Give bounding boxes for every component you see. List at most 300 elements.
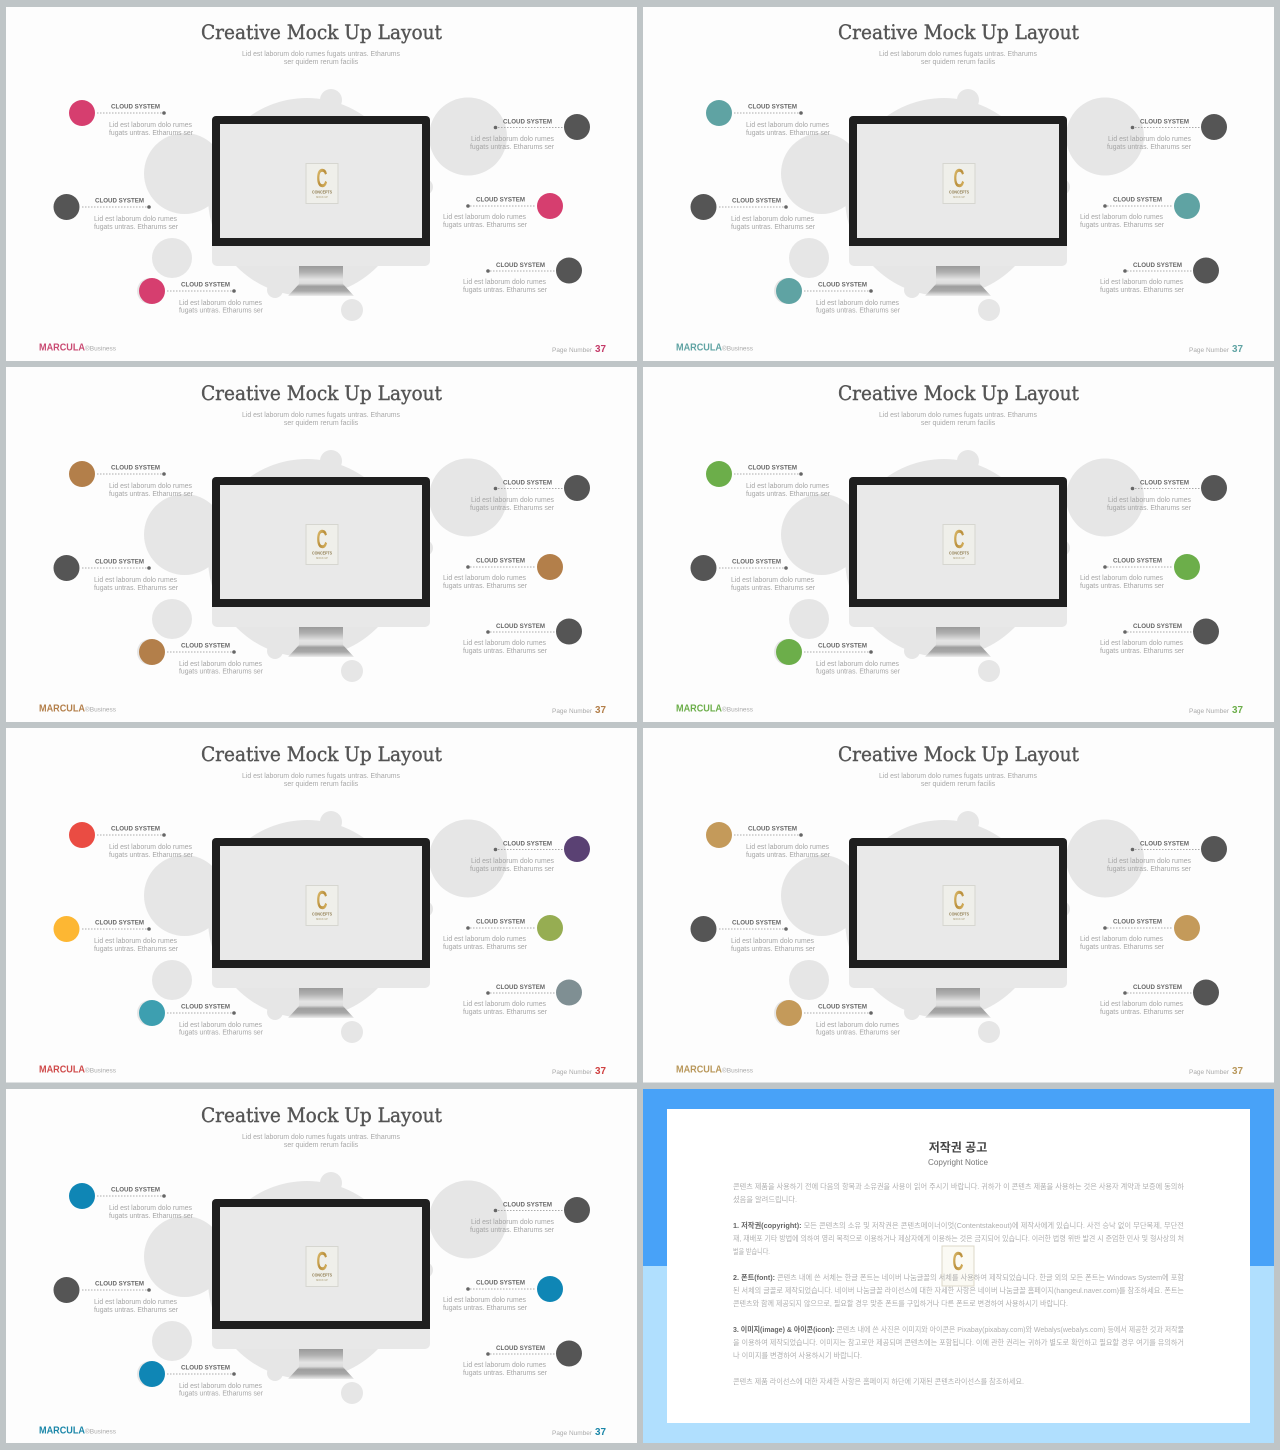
node: right 3: CLOUD SYSTEM (496, 262, 545, 269)
footer brand (676, 1064, 754, 1076)
node: right 3: Lid est laborum dolo rumes (1100, 640, 1183, 647)
slide 5: multicolour (6, 728, 637, 1082)
node: left 3: CLOUD SYSTEM (818, 1004, 867, 1010)
node: left 1: CLOUD SYSTEM (748, 464, 797, 472)
monitor: C (954, 524, 965, 554)
node: right 3 (1100, 258, 1219, 294)
node: left 1: fugats untras. Etharums ser (746, 491, 831, 498)
node: right 1 (470, 475, 590, 512)
node: left 2: CLOUD SYSTEM (95, 920, 144, 926)
node: right 1 (1107, 836, 1227, 873)
node: left 1: CLOUD SYSTEM (111, 104, 160, 110)
subtitle (242, 773, 400, 788)
node: right 1: Lid est laborum dolo rumes (471, 858, 554, 865)
page number (552, 1065, 606, 1077)
subtitle (242, 412, 400, 427)
subtitle (879, 773, 1037, 788)
watermark logo: C (952, 1246, 964, 1276)
node: right 3: Lid est laborum dolo rumes (463, 1362, 546, 1369)
page number: 37 (595, 704, 606, 716)
node: left 1: fugats untras. Etharums ser (746, 130, 831, 137)
watermark logo (942, 1246, 974, 1286)
notice title: 저작권 공고 (929, 1140, 987, 1154)
node: right 2: CLOUD SYSTEM (1113, 558, 1162, 564)
monitor (849, 116, 1067, 296)
node: right 3: CLOUD SYSTEM (1133, 984, 1182, 991)
node: right 1: fugats untras. Etharums ser (470, 1227, 555, 1234)
node: left 1: CLOUD SYSTEM (111, 826, 160, 832)
section 2 font: 된 서체의 글꼴로 제작되었습니다. 네이버 나눔글꼴 라이선스에 대한 자세한 사항은 네이버 나눔글꼴 홈페이지(hangeul.naver.com)를 참조하세요. 폰트는 (733, 1285, 1184, 1295)
footer brand: MARCULA (676, 702, 722, 714)
node: left 2: CLOUD SYSTEM (732, 920, 781, 926)
node: right 3: Lid est laborum dolo rumes (1100, 1001, 1183, 1008)
node: left 3: fugats untras. Etharums ser (816, 308, 901, 314)
node: right 3: CLOUD SYSTEM (1133, 262, 1182, 269)
subtitle: Lid est laborum dolo rumes fugats untras. Etharums (879, 773, 1037, 780)
monitor: C (316, 885, 328, 915)
monitor: MOCK UP (953, 557, 965, 560)
monitor: C (316, 1246, 328, 1276)
node: left 2: Lid est laborum dolo rumes (94, 938, 177, 945)
monitor: CONCEPTS (312, 550, 332, 556)
node: right 1: fugats untras. Etharums ser (1107, 505, 1192, 512)
subtitle (242, 51, 400, 66)
node: right 2: Lid est laborum dolo rumes (443, 214, 526, 221)
footer brand: MARCULA (39, 1064, 85, 1076)
node: left 3: CLOUD SYSTEM (818, 642, 867, 650)
section 1 copyright: 재, 재배포 기타 방법에 의하여 영리 목적으로 이용하거나 제삼자에게 이용하는 것은 금지되어 있습니다. 이러한 법령 위반 발견 시 준엄한 민사 및 형사상의 처 (733, 1233, 1184, 1243)
node: left 2 (690, 194, 816, 231)
node: left 3: Lid est laborum dolo rumes (179, 1022, 262, 1029)
section 3 image and icon: 3. 이미지(image) & 아이콘(icon): 콘텐츠 내에 쓴 사진은 이미지와 아이콘은 Pixabay(pixabay.com)와 Webalys(webalys.com) 등에서 제공한 것과 저작물 (733, 1324, 1184, 1334)
node: left 2: Lid est laborum dolo rumes (94, 216, 177, 223)
intro text: 셨음을 알려드립니다. (733, 1194, 797, 1204)
node: right 3 (1100, 618, 1219, 655)
node: right 2: Lid est laborum dolo rumes (1080, 575, 1163, 582)
node: right 2: fugats untras. Etharums ser (443, 944, 528, 951)
slide 6: tan (643, 728, 1274, 1082)
title: Creative Mock Up Layout (838, 381, 1079, 405)
footer brand: ®Business (85, 344, 117, 352)
node: left 3: fugats untras. Etharums ser (816, 1030, 901, 1036)
footer brand: MARCULA (39, 342, 85, 354)
page number: 37 (1232, 704, 1243, 716)
section 1 copyright: 1. 저작권(copyright): 모든 콘텐츠의 소유 및 저작권은 콘텐츠메이너이엇(Contentstakeout)에 제작사에게 있습니다. 사전 승낙 없이 무단복제, 무단전 (733, 1220, 1184, 1230)
node: left 1: Lid est laborum dolo rumes (109, 1205, 192, 1212)
node: left 2: Lid est laborum dolo rumes (731, 577, 814, 584)
page number (552, 343, 606, 355)
section 3 image and icon: 나 이미지를 변경하여 사용하시기 바랍니다. (733, 1350, 862, 1360)
node: left 1: fugats untras. Etharums ser (109, 130, 194, 137)
node: left 1 (69, 461, 194, 498)
subtitle: Lid est laborum dolo rumes fugats untras. Etharums (879, 51, 1037, 58)
node: left 1 (706, 100, 831, 137)
node: left 2 (54, 194, 179, 231)
footer brand (39, 702, 117, 714)
node: right 1: Lid est laborum dolo rumes (1108, 497, 1191, 504)
monitor: MOCK UP (316, 196, 328, 199)
footer brand: MARCULA (39, 1424, 85, 1436)
subtitle: ser quidem rerum facilis (921, 781, 996, 788)
monitor: CONCEPTS (312, 190, 332, 194)
monitor: C (316, 524, 328, 554)
node: right 3: fugats untras. Etharums ser (1100, 287, 1185, 294)
node: left 1 (69, 822, 194, 859)
node: left 2: CLOUD SYSTEM (95, 1280, 144, 1288)
node: right 3 (1100, 980, 1219, 1016)
node: left 3 (139, 639, 264, 676)
node: right 2 (1080, 193, 1200, 229)
two-tone blue background (643, 1089, 1274, 1443)
node: left 3: CLOUD SYSTEM (181, 282, 230, 288)
title: Creative Mock Up Layout (838, 742, 1079, 766)
node: left 2: Lid est laborum dolo rumes (731, 938, 814, 945)
node: right 2: Lid est laborum dolo rumes (1080, 936, 1163, 943)
node: left 3: Lid est laborum dolo rumes (179, 1383, 262, 1390)
node: left 1: CLOUD SYSTEM (748, 826, 797, 832)
node: left 3 (776, 1000, 901, 1036)
node: left 2: fugats untras. Etharums ser (731, 585, 816, 592)
footer brand: ®Business (722, 344, 754, 352)
node: right 1: fugats untras. Etharums ser (1107, 144, 1192, 151)
page number: Page Number (552, 1430, 593, 1437)
node: right 1 (470, 1197, 590, 1234)
node: right 2: fugats untras. Etharums ser (1080, 944, 1165, 951)
page number: Page Number (1189, 708, 1230, 715)
node: right 2: CLOUD SYSTEM (476, 196, 525, 204)
node: right 3: fugats untras. Etharums ser (463, 648, 548, 655)
footer brand (676, 342, 754, 354)
node: left 2 (690, 916, 816, 953)
node: right 3: CLOUD SYSTEM (496, 623, 545, 630)
node: left 1: Lid est laborum dolo rumes (109, 844, 192, 851)
node: right 3: fugats untras. Etharums ser (463, 1370, 548, 1377)
node: left 3: Lid est laborum dolo rumes (816, 300, 899, 307)
node: right 2 (443, 554, 563, 590)
node: left 3: CLOUD SYSTEM (181, 642, 230, 650)
node: right 3: CLOUD SYSTEM (496, 1345, 545, 1352)
page number: Page Number (552, 347, 593, 354)
node: right 2: Lid est laborum dolo rumes (443, 936, 526, 943)
node: right 2: Lid est laborum dolo rumes (443, 1297, 526, 1304)
node: left 2: CLOUD SYSTEM (95, 558, 144, 566)
node: left 2 (54, 1277, 179, 1314)
node: left 2: fugats untras. Etharums ser (94, 224, 179, 231)
node: right 1: CLOUD SYSTEM (503, 118, 552, 126)
node: right 1: Lid est laborum dolo rumes (471, 136, 554, 143)
node: right 2 (1080, 554, 1200, 590)
section 2 font: 콘텐츠와 함께 제공되지 않으므로, 필요할 경우 맞춘 폰트를 구입하거나 다른 폰트로 변경하여 사용하시기 바랍니다. (733, 1298, 1068, 1308)
node: left 3 (776, 278, 901, 314)
node: left 3: fugats untras. Etharums ser (179, 668, 264, 676)
node: right 1: fugats untras. Etharums ser (470, 144, 555, 151)
background circles (137, 89, 507, 321)
node: left 2: CLOUD SYSTEM (732, 558, 781, 566)
footer brand: ®Business (722, 706, 754, 714)
monitor: MOCK UP (316, 1279, 328, 1282)
node: right 2: CLOUD SYSTEM (476, 918, 525, 926)
node: left 2: fugats untras. Etharums ser (94, 1307, 179, 1314)
node: right 1: Lid est laborum dolo rumes (1108, 858, 1191, 865)
section 3 image and icon (733, 1324, 1184, 1360)
node: right 2 (1080, 915, 1200, 951)
node: left 3: Lid est laborum dolo rumes (816, 661, 899, 668)
node: left 2: Lid est laborum dolo rumes (731, 216, 814, 223)
node: right 1: CLOUD SYSTEM (1140, 840, 1189, 848)
slide 7: blue (6, 1089, 637, 1443)
background circles (137, 1172, 507, 1404)
node: left 1: Lid est laborum dolo rumes (746, 844, 829, 851)
node: right 3 (463, 980, 582, 1016)
section 1 copyright: 벌을 받습니다. (733, 1246, 770, 1256)
background circles (774, 450, 1144, 682)
monitor: CONCEPTS (312, 1272, 332, 1278)
section 2 font (733, 1272, 1184, 1308)
page number: Page Number (552, 708, 593, 715)
node: right 1 (470, 114, 590, 151)
monitor: MOCK UP (316, 918, 328, 921)
node: left 3: CLOUD SYSTEM (181, 1004, 230, 1010)
node: left 3 (139, 278, 264, 314)
node: right 1: Lid est laborum dolo rumes (471, 497, 554, 504)
subtitle: Lid est laborum dolo rumes fugats untras. Etharums (242, 51, 400, 58)
page number: 37 (595, 1426, 606, 1438)
node: right 1: CLOUD SYSTEM (1140, 480, 1189, 486)
monitor (212, 477, 430, 657)
node: right 1: CLOUD SYSTEM (503, 1202, 552, 1208)
node: right 1 (1107, 475, 1227, 512)
monitor: C (954, 885, 965, 915)
subtitle: ser quidem rerum facilis (284, 1142, 359, 1149)
white notice panel (667, 1109, 1250, 1423)
slide 4: green (643, 367, 1274, 722)
node: right 1: fugats untras. Etharums ser (470, 505, 555, 512)
node: right 1 (470, 836, 590, 873)
node: right 3 (463, 1340, 582, 1377)
node: left 3: CLOUD SYSTEM (818, 282, 867, 288)
background circles (137, 450, 507, 682)
footer brand (39, 342, 117, 354)
node: left 1: Lid est laborum dolo rumes (746, 122, 829, 129)
background circles (774, 89, 1144, 321)
node: left 1: CLOUD SYSTEM (111, 1186, 160, 1194)
monitor: C (316, 163, 328, 193)
node: left 3: Lid est laborum dolo rumes (179, 661, 262, 668)
section 1 copyright (733, 1220, 1184, 1256)
node: left 3: CLOUD SYSTEM (181, 1364, 230, 1372)
node: right 1: Lid est laborum dolo rumes (471, 1219, 554, 1226)
node: right 3: fugats untras. Etharums ser (1100, 648, 1185, 655)
node: right 1: Lid est laborum dolo rumes (1108, 136, 1191, 143)
node: left 3 (139, 1361, 264, 1398)
page number: 37 (595, 343, 606, 355)
node: right 3: Lid est laborum dolo rumes (463, 1001, 546, 1008)
node: right 2: Lid est laborum dolo rumes (1080, 214, 1163, 221)
monitor: MOCK UP (953, 196, 965, 199)
slide 8: copyright notice (643, 1089, 1274, 1443)
page number (552, 704, 606, 716)
node: left 2: Lid est laborum dolo rumes (94, 1299, 177, 1306)
subtitle (879, 412, 1037, 427)
node: left 1 (69, 1183, 194, 1220)
node: left 3: fugats untras. Etharums ser (179, 308, 264, 314)
node: right 3: fugats untras. Etharums ser (1100, 1009, 1185, 1016)
node: left 3: fugats untras. Etharums ser (179, 1390, 264, 1398)
node: left 3: fugats untras. Etharums ser (816, 668, 901, 676)
node: right 3: CLOUD SYSTEM (1133, 623, 1182, 630)
subtitle: ser quidem rerum facilis (284, 781, 359, 788)
title: Creative Mock Up Layout (201, 381, 442, 405)
footer brand: ®Business (85, 706, 117, 714)
node: left 1: fugats untras. Etharums ser (109, 491, 194, 498)
subtitle: ser quidem rerum facilis (921, 420, 996, 427)
node: right 3: Lid est laborum dolo rumes (463, 640, 546, 647)
node: right 2: fugats untras. Etharums ser (1080, 583, 1165, 590)
slide 1: pink (6, 7, 637, 361)
slide 3: brown (6, 367, 637, 722)
footer brand (676, 702, 754, 714)
intro text: 콘텐츠 제품을 사용하기 전에 다음의 항목과 소유권을 사용이 읽어 주시기 바랍니다. 귀하가 이 콘텐츠 제품을 사용하는 것은 사용자 계약과 보증에 동의하 (733, 1181, 1184, 1191)
node: right 1 (1107, 114, 1227, 151)
node: left 2: CLOUD SYSTEM (95, 198, 144, 204)
page number (552, 1426, 606, 1438)
node: right 3 (463, 618, 582, 655)
footer brand: ®Business (85, 1066, 117, 1074)
node: left 1: Lid est laborum dolo rumes (109, 122, 192, 129)
section 2 font: 2. 폰트(font): 콘텐츠 내에 쓴 서체는 한글 폰트는 네이버 나눔글꼴의 서체를 사용하여 제작되었습니다. 한글 외의 모든 폰트는 Windows System에 포함 (733, 1272, 1184, 1282)
monitor: MOCK UP (953, 918, 965, 921)
subtitle: Lid est laborum dolo rumes fugats untras. Etharums (242, 1134, 400, 1141)
node: right 3: fugats untras. Etharums ser (463, 1009, 548, 1016)
footer brand (39, 1064, 117, 1076)
node: left 1: Lid est laborum dolo rumes (746, 483, 829, 490)
subtitle: Lid est laborum dolo rumes fugats untras. Etharums (242, 412, 400, 419)
node: left 2 (690, 555, 816, 592)
background circles (774, 811, 1144, 1043)
page number (1189, 343, 1243, 355)
node: left 1 (69, 100, 194, 137)
node: left 3: Lid est laborum dolo rumes (816, 1022, 899, 1029)
footer brand: MARCULA (39, 702, 85, 714)
node: left 2 (54, 916, 179, 953)
node: left 2: fugats untras. Etharums ser (94, 585, 179, 592)
node: right 2: fugats untras. Etharums ser (443, 222, 528, 229)
monitor (212, 116, 430, 296)
monitor: CONCEPTS (949, 550, 969, 556)
node: left 2 (54, 555, 179, 592)
subtitle: ser quidem rerum facilis (921, 59, 996, 66)
background circles (137, 811, 507, 1043)
node: right 2 (443, 1276, 563, 1312)
node: right 2: fugats untras. Etharums ser (1080, 222, 1165, 229)
monitor: MOCK UP (316, 557, 328, 560)
monitor: CONCEPTS (949, 912, 969, 916)
node: right 2 (443, 915, 563, 951)
subtitle: Lid est laborum dolo rumes fugats untras. Etharums (242, 773, 400, 780)
node: right 1: CLOUD SYSTEM (1140, 118, 1189, 126)
slide 2: teal (643, 7, 1274, 361)
monitor (212, 1199, 430, 1379)
node: left 2: CLOUD SYSTEM (732, 198, 781, 204)
node: right 1: fugats untras. Etharums ser (1107, 866, 1192, 873)
node: right 2: CLOUD SYSTEM (476, 1280, 525, 1286)
node: left 3 (776, 639, 901, 676)
subtitle: Lid est laborum dolo rumes fugats untras. Etharums (879, 412, 1037, 419)
node: left 2: fugats untras. Etharums ser (731, 946, 816, 953)
page number (1189, 1065, 1243, 1077)
page number: Page Number (552, 1069, 593, 1076)
node: left 1 (706, 822, 831, 859)
node: right 2: fugats untras. Etharums ser (443, 583, 528, 590)
section 3 image and icon: 을 이용하여 제작되었습니다. 이미지는 참고로만 제공되며 콘텐츠에는 포함됩니다. 이에 관한 권리는 귀하가 별도로 확인하고 필요할 경우 여기를 유의하거 (733, 1337, 1184, 1347)
node: left 1 (706, 461, 831, 498)
node: left 1: fugats untras. Etharums ser (109, 852, 194, 859)
node: right 2: CLOUD SYSTEM (476, 558, 525, 564)
node: left 3 (139, 1000, 264, 1036)
page number: 37 (595, 1065, 606, 1077)
title: Creative Mock Up Layout (201, 742, 442, 766)
monitor: CONCEPTS (949, 190, 969, 194)
page number: 37 (1232, 1065, 1243, 1077)
node: right 2: fugats untras. Etharums ser (443, 1305, 528, 1312)
node: right 1: CLOUD SYSTEM (503, 480, 552, 486)
title: Creative Mock Up Layout (838, 20, 1079, 44)
page number: Page Number (1189, 1069, 1230, 1076)
node: right 3: Lid est laborum dolo rumes (463, 279, 546, 286)
page number: Page Number (1189, 347, 1230, 354)
footer brand: MARCULA (676, 1064, 722, 1076)
monitor: C (954, 163, 965, 193)
monitor (849, 838, 1067, 1018)
node: left 2: fugats untras. Etharums ser (94, 946, 179, 953)
monitor (212, 838, 430, 1018)
node: left 1: CLOUD SYSTEM (748, 104, 797, 110)
node: right 2: CLOUD SYSTEM (1113, 196, 1162, 204)
node: right 3: Lid est laborum dolo rumes (1100, 279, 1183, 286)
node: right 2: CLOUD SYSTEM (1113, 918, 1162, 926)
node: right 3 (463, 258, 582, 294)
node: left 1: fugats untras. Etharums ser (109, 1213, 194, 1220)
notice subtitle: Copyright Notice (928, 1158, 989, 1167)
node: left 3: Lid est laborum dolo rumes (179, 300, 262, 307)
subtitle: ser quidem rerum facilis (284, 420, 359, 427)
node: right 2 (443, 193, 563, 229)
title: Creative Mock Up Layout (201, 1103, 442, 1127)
node: right 3: CLOUD SYSTEM (496, 984, 545, 991)
footer brand (39, 1424, 117, 1436)
title: Creative Mock Up Layout (201, 20, 442, 44)
node: right 3: fugats untras. Etharums ser (463, 287, 548, 294)
node: left 3: fugats untras. Etharums ser (179, 1030, 264, 1036)
node: left 2: fugats untras. Etharums ser (731, 224, 816, 231)
node: left 2: Lid est laborum dolo rumes (94, 577, 177, 584)
closing note: 콘텐츠 제품 라이선스에 대한 자세한 사항은 홈페이지 하단에 기재된 콘텐츠라이선스를 참조하세요. (733, 1376, 1024, 1386)
node: left 1: Lid est laborum dolo rumes (109, 483, 192, 490)
page number: 37 (1232, 343, 1243, 355)
footer brand: ®Business (722, 1066, 754, 1074)
node: right 1: fugats untras. Etharums ser (470, 866, 555, 873)
node: left 1: fugats untras. Etharums ser (746, 852, 831, 859)
monitor (849, 477, 1067, 657)
footer brand: ®Business (85, 1428, 117, 1436)
footer brand: MARCULA (676, 342, 722, 354)
node: right 2: Lid est laborum dolo rumes (443, 575, 526, 582)
node: left 1: CLOUD SYSTEM (111, 464, 160, 472)
node: right 1: CLOUD SYSTEM (503, 840, 552, 848)
subtitle: ser quidem rerum facilis (284, 59, 359, 66)
monitor: CONCEPTS (312, 912, 332, 916)
intro text (733, 1181, 1184, 1204)
